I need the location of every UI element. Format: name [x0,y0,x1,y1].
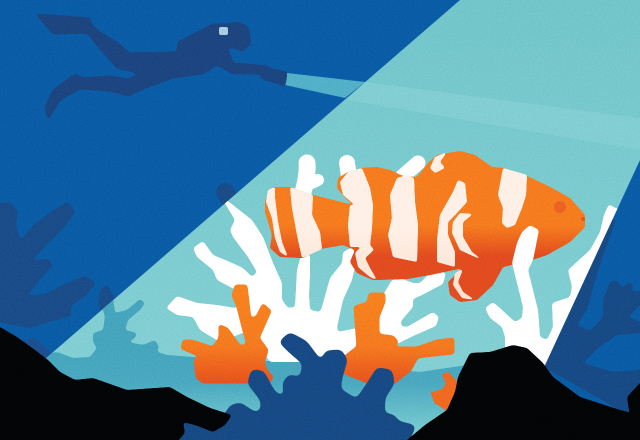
diver goggle strap gap [219,27,228,35]
left background coral silhouette [0,203,95,327]
fish eye [554,201,566,213]
small orange coral [432,373,457,410]
lighter band across the cone [347,82,640,150]
fish nose [581,217,585,221]
left black rock [0,320,232,440]
small coral behind left rock [20,338,56,366]
left white coral mass [166,195,360,362]
left orange coral [182,286,272,383]
fish cream stripes [266,152,527,300]
fish body [265,151,585,302]
diver silhouette with flashlight [36,14,287,120]
sea floor with lit coral silhouette [46,300,464,436]
right black rock [395,345,640,440]
bleached white coral [166,163,446,362]
white coral top branches [300,163,418,202]
right orange coral [345,294,453,383]
black rock at right edge [627,370,640,420]
right background coral silhouette [540,218,640,430]
middle coral silhouette outside the beam [100,287,115,330]
coral tip shadow above the beam [225,192,236,210]
clownfish [265,151,585,302]
foreground navy coral [170,335,413,440]
white coral branches in front of fish [486,205,618,366]
flashlight beam: narrow part [285,73,365,98]
centre white coral [380,272,446,344]
